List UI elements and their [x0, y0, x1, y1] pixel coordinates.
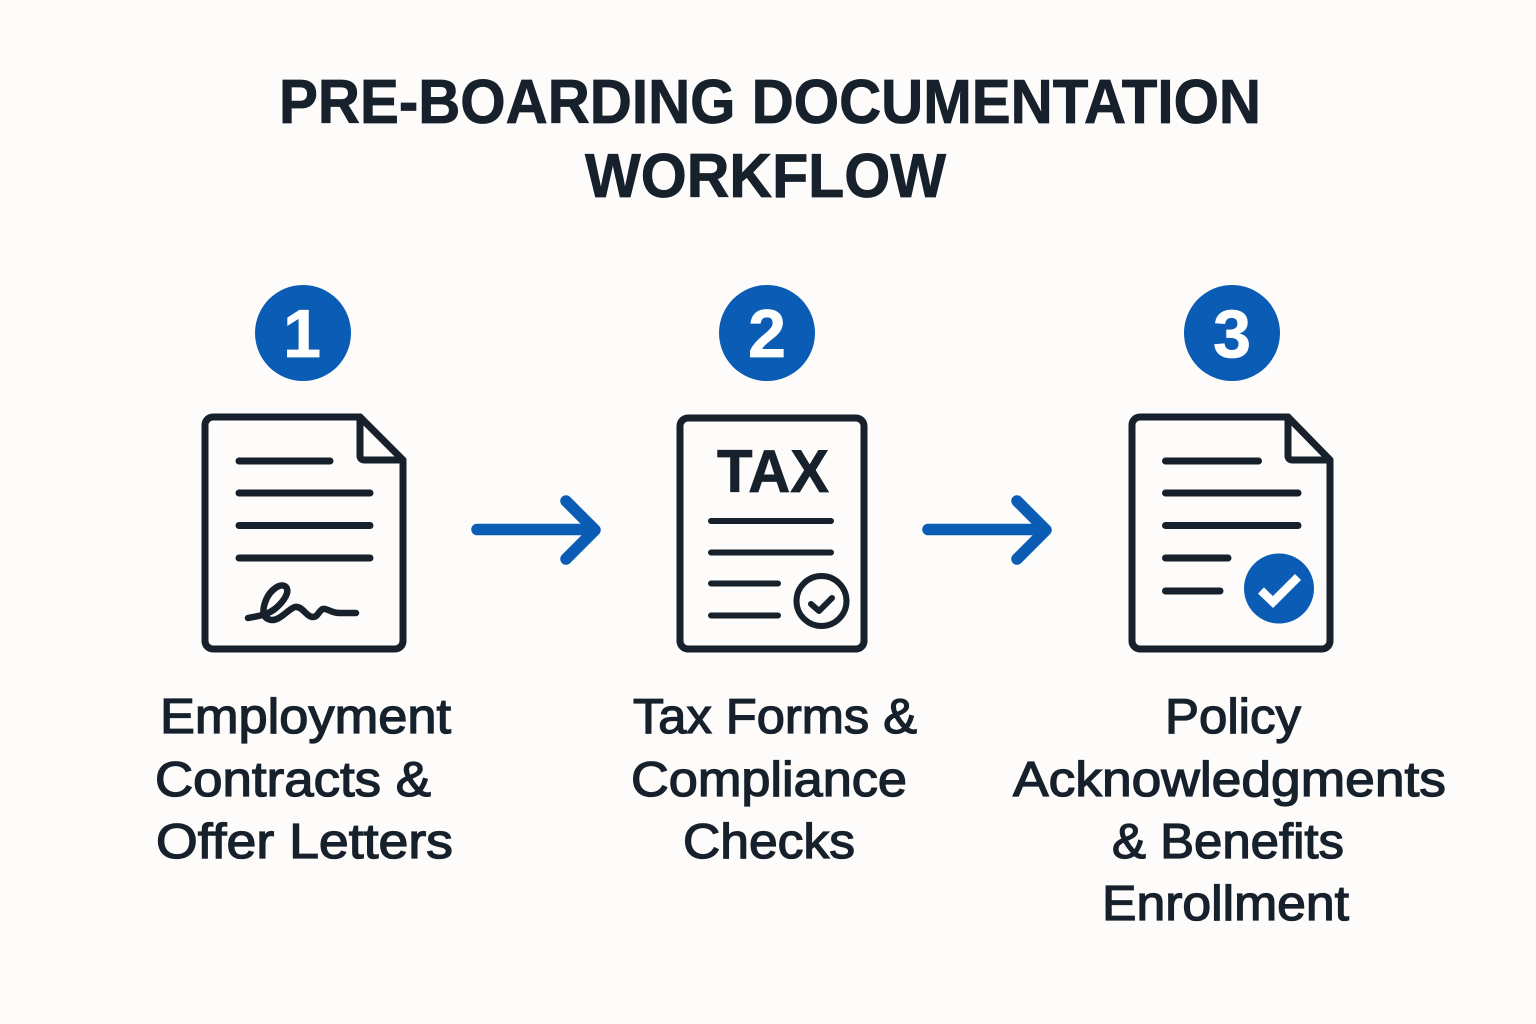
- step 2 column: [631, 285, 917, 869]
- arrow: step 1 to step 2: [477, 501, 595, 559]
- step 1 number badge: 1: [283, 296, 321, 372]
- step 1 label: Contracts &: [155, 753, 431, 807]
- step 2 label: Checks: [683, 815, 855, 869]
- step 2 label: [631, 690, 917, 869]
- step 1 number badge: [255, 285, 351, 381]
- step 2 label: Tax Forms &: [633, 690, 917, 744]
- step 3 label: Acknowledgments: [1013, 753, 1446, 807]
- step 3 column: [1013, 285, 1446, 931]
- icon: employment contract with signature: [205, 417, 403, 649]
- step 3 label: Enrollment: [1102, 877, 1349, 931]
- step 3 label: Policy: [1165, 690, 1302, 744]
- step 2 label: Compliance: [631, 753, 907, 807]
- step 1 label: Offer Letters: [156, 815, 453, 869]
- step 3 label: & Benefits: [1112, 815, 1344, 869]
- arrow: step 2 to step 3: [928, 501, 1046, 559]
- icon: policy document with blue check: [1132, 417, 1330, 649]
- step 3 label: [1013, 690, 1446, 931]
- icon: tax form with check: TAX: [717, 438, 829, 505]
- step 3 number badge: [1184, 285, 1280, 381]
- icon: tax form with check: [680, 418, 864, 649]
- title: WORKFLOW: [585, 142, 946, 211]
- step 2 number badge: [719, 285, 815, 381]
- step 1 label: [155, 690, 453, 869]
- title: [279, 68, 1261, 211]
- step 3 number badge: 3: [1213, 296, 1251, 372]
- step 1 label: Employment: [160, 690, 451, 744]
- step 1 column: [155, 285, 453, 869]
- title: PRE-BOARDING DOCUMENTATION: [279, 68, 1261, 137]
- step 2 number badge: 2: [748, 296, 786, 372]
